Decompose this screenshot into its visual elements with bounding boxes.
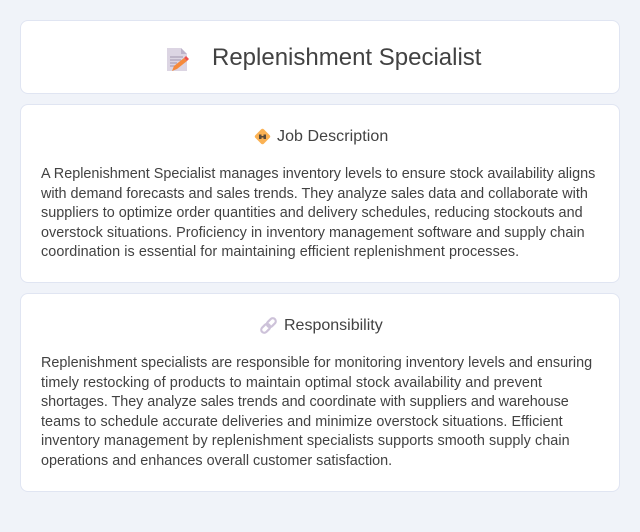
text block: job description: with demand forecasts and sales trends. They analyze sales data and collaborate with	[41, 186, 588, 202]
text block: responsibility: inventory management by replenishment specialists supports smooth supply chain	[41, 433, 570, 449]
text block: responsibility	[41, 355, 592, 469]
text block: job description	[41, 166, 595, 260]
text block: job description: suppliers to optimize order quantities and delivery schedules, reducing stockouts and	[41, 205, 583, 221]
icon: chain link	[260, 317, 277, 334]
text block: responsibility: operations and enhances overall customer satisfaction.	[41, 453, 392, 469]
text block: job description: overstock situations. Proficiency in inventory management software and supply chain	[41, 225, 585, 241]
text block: responsibility: Replenishment specialists are responsible for monitoring inventory levels and ensuring	[41, 355, 592, 371]
text block: job description: coordination is essential for maintaining efficient replenishment processes.	[41, 244, 519, 260]
text block: job description: A Replenishment Specialist manages inventory levels to ensure stock availability aligns	[41, 166, 595, 182]
heading: job description: Job Description	[277, 128, 388, 145]
text block: responsibility: shortages. They analyze sales trends and coordinate with suppliers and warehouse	[41, 394, 569, 410]
icon: orange diamond	[254, 128, 270, 144]
text block: responsibility: teams to schedule accurate deliveries and minimize overstock situations. Efficient	[41, 414, 563, 430]
panel: title card	[20, 20, 620, 94]
heading: responsibility: Responsibility	[284, 317, 383, 334]
panel: responsibility	[20, 293, 620, 492]
title: Replenishment Specialist	[212, 44, 481, 71]
icon: document with pencil	[167, 48, 189, 71]
panel: job description	[20, 104, 620, 283]
text block: responsibility: timely restocking of products to maintain optimal stock availability and prevent	[41, 375, 542, 391]
